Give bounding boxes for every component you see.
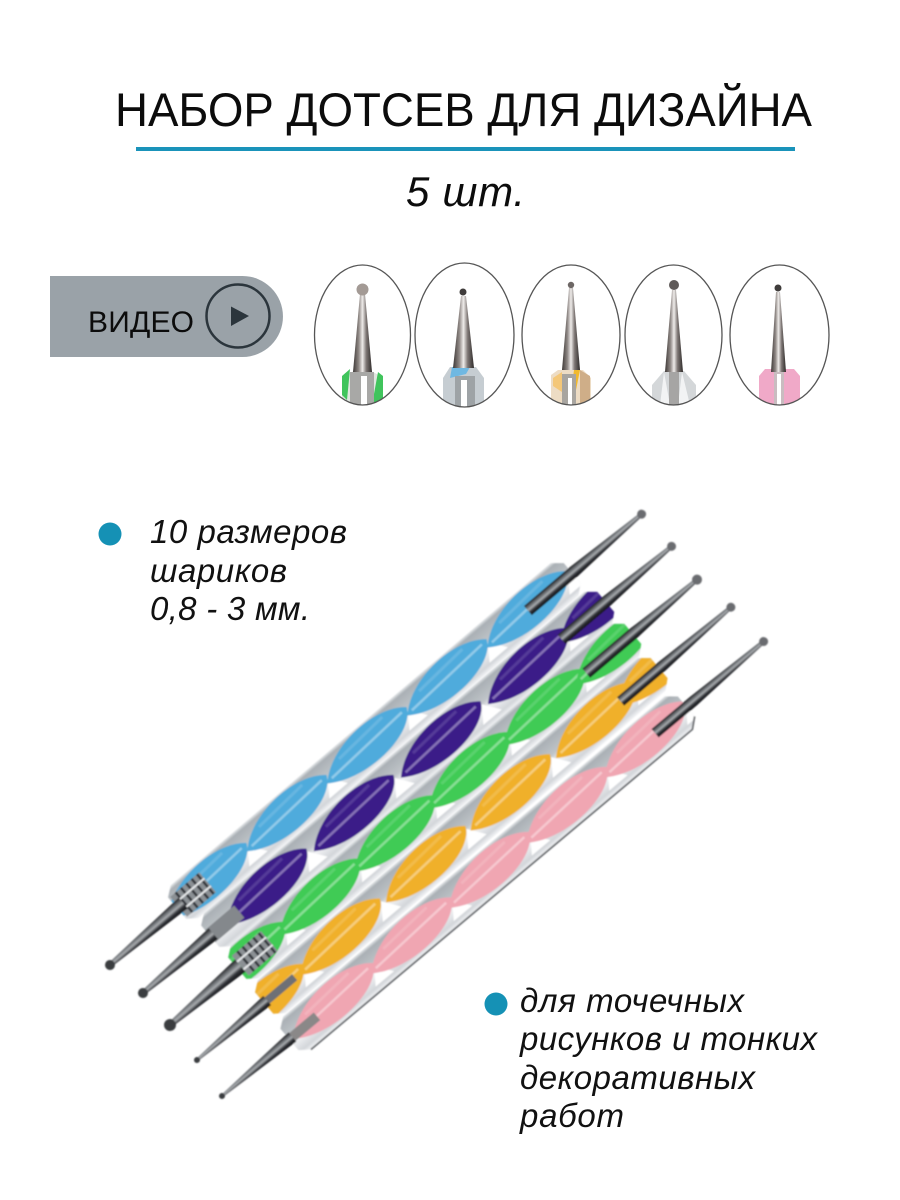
title underline: [136, 147, 795, 151]
thumbnail: blue tool: [415, 263, 514, 408]
video button: [50, 276, 283, 357]
bullet text: декоративных: [520, 1059, 756, 1096]
tool: blue: [92, 495, 659, 985]
bullet: usage: [484, 982, 818, 1134]
bullet text: работ: [519, 1097, 624, 1134]
title: НАБОР ДОТСЕВ ДЛЯ ДИЗАЙНА: [115, 83, 813, 136]
bullet text: 10 размеров: [150, 513, 347, 550]
tool: green: [152, 560, 715, 1045]
thumbnail: yellow tool: [522, 265, 620, 405]
thumbnail: clear tool: [625, 265, 722, 405]
bullet dot: [484, 992, 508, 1016]
tool: purple: [125, 527, 689, 1013]
bullet dot: [98, 522, 122, 546]
bullet text: [519, 982, 818, 1134]
button pill: [50, 276, 283, 357]
bullet text: рисунков и тонких: [519, 1020, 818, 1057]
thumbnail: green tool: [314, 265, 410, 405]
bullet text: шариков: [150, 552, 287, 589]
product photo: five dotting tools: [92, 495, 781, 1114]
button label: ВИДЕО: [88, 306, 194, 339]
subtitle: 5 pieces: 5 шт.: [406, 168, 525, 215]
tool: pink: [206, 622, 781, 1114]
thumbnail: pink tool: [730, 265, 829, 405]
bullet text: 0,8 - 3 мм.: [150, 590, 310, 627]
icon: play: [206, 284, 270, 348]
tool: yellow: [181, 588, 748, 1078]
tip close-up thumbnails: [314, 263, 829, 408]
bullet text: [150, 513, 347, 627]
bullet: ball sizes: [98, 513, 347, 627]
bullet text: для точечных: [520, 982, 746, 1019]
